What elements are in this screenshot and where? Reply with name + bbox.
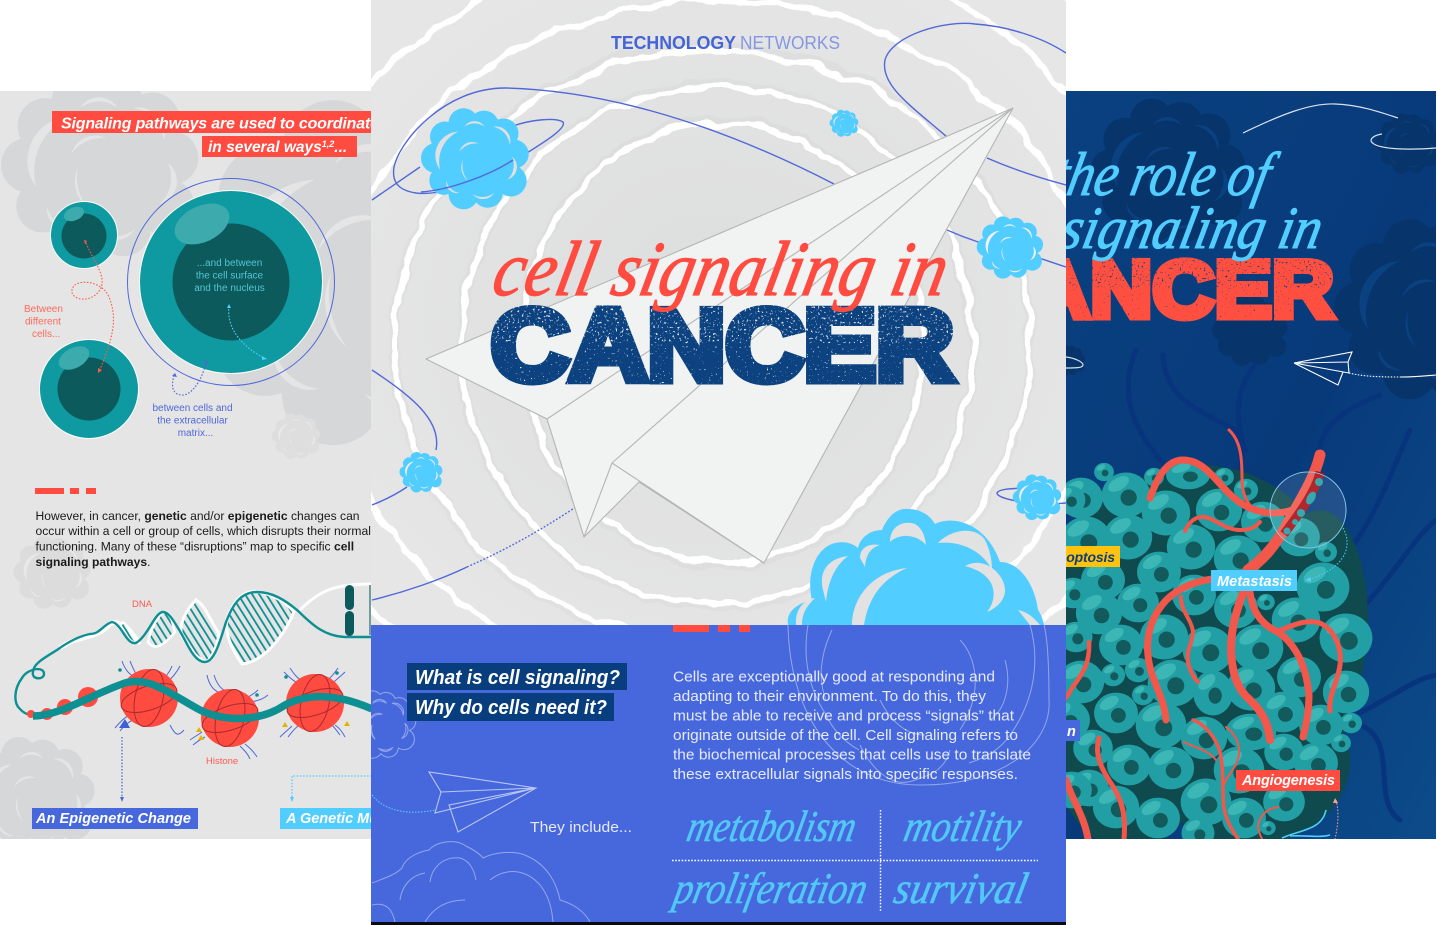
script words: responses: metabolism <box>683 801 861 851</box>
paragraph: what cell signaling is: these extracellular signals into specific responses. <box>673 766 1018 783</box>
script words: responses <box>667 801 1032 913</box>
icon: white paper plane <box>1294 352 1436 385</box>
question headings: Why do cells need it? <box>415 696 607 719</box>
arrow: surface to nucleus <box>227 304 267 360</box>
paragraph: what cell signaling is <box>673 668 1031 783</box>
label: Metastasis: Metastasis <box>1217 574 1292 590</box>
label: They include: They include... <box>530 820 632 836</box>
icon: light blue vessel tip <box>1282 810 1330 838</box>
magnifier: vessel with circulating cells <box>1270 472 1346 548</box>
dotted grid divider <box>672 810 1038 912</box>
paragraph: what cell signaling is: the biochemical processes that cells use to translate <box>673 746 1031 764</box>
label: DNA: DNA <box>132 599 153 610</box>
paragraph: disruptions in cancer <box>36 509 371 569</box>
label: between different cells <box>24 305 62 337</box>
title: CANCER, coral: CANCER <box>966 245 1334 335</box>
red dash divider <box>673 625 750 632</box>
red dash divider <box>35 488 96 494</box>
cell: small upper <box>50 202 118 268</box>
cloud planets <box>399 108 1061 520</box>
label: Proliferation: n <box>1067 724 1076 740</box>
label: cell surface and nucleus: ...and between <box>197 258 262 269</box>
background clouds <box>0 74 555 855</box>
orbit in front of planets <box>421 160 513 192</box>
arrow: angiogenesis pointer <box>1333 798 1338 839</box>
dark background clouds <box>1053 99 1437 399</box>
title: cell signaling in, red script: cell signaling in <box>486 227 957 313</box>
label: Apoptosis <box>1066 546 1120 567</box>
question headings <box>407 663 627 721</box>
label: Metastasis <box>1211 570 1297 591</box>
label: cell surface and nucleus <box>194 258 264 291</box>
tumor cluster base <box>1066 465 1368 839</box>
cell: large with membrane ring <box>128 178 334 386</box>
title: the role of: the role of <box>1047 140 1284 209</box>
panel: right page, role of signaling in cancer <box>1066 91 1436 839</box>
heading banner: signaling pathways: ... <box>334 139 347 156</box>
label: between different cells: Between <box>24 304 63 315</box>
label box: A Genetic Mutation: A Genetic Mutation <box>285 811 418 827</box>
label: Angiogenesis: Angiogenesis <box>1241 773 1335 789</box>
curve: white top orbit <box>1066 104 1436 368</box>
tentacle shadows <box>1128 350 1436 820</box>
blood vessels <box>1066 430 1340 839</box>
paragraph: disruptions in cancer: occur within a cell or group of cells, which disrupts their normal <box>36 524 371 538</box>
question headings: What is cell signaling? <box>415 666 620 689</box>
script words: responses: survival <box>890 863 1032 913</box>
tumor cells <box>1046 461 1372 848</box>
label: between different cells: cells... <box>32 329 60 340</box>
label: between different cells: different <box>25 316 61 328</box>
panel: blue lower band <box>344 509 1066 925</box>
cell: lower <box>40 340 138 438</box>
paper plane <box>426 108 1013 563</box>
panel: center cover page <box>196 0 1236 925</box>
label: Histone: Histone <box>206 756 238 767</box>
heading banner: signaling pathways: Signaling pathways are used to coordinate <box>61 116 379 132</box>
big blue cloud <box>788 509 1049 785</box>
DNA helix and chromosome <box>15 584 374 715</box>
label: cell surface and nucleus: the cell surface <box>196 270 264 282</box>
arrow: between different cells <box>72 240 113 373</box>
paragraph: what cell signaling is: originate outside of the cell. Cell signaling refers to <box>673 727 1018 744</box>
heading banner: signaling pathways: 1,2 <box>322 139 334 149</box>
arrow: magnifier to metastasis <box>1305 528 1347 582</box>
histones with wrapped strand <box>27 661 372 759</box>
paragraph: what cell signaling is: adapting to their environment. To do this, they <box>673 688 987 705</box>
title: CANCER, navy: CANCER <box>491 290 954 402</box>
paragraph: disruptions in cancer: signaling pathways. <box>36 555 150 569</box>
paragraph: what cell signaling is: Cells are exceptionally good at responding and <box>673 668 995 686</box>
heading banner: signaling pathways <box>52 111 379 157</box>
paragraph: what cell signaling is: must be able to receive and process “signals” that <box>673 708 1015 724</box>
paragraph: disruptions in cancer: However, in cancer, genetic and/or epigenetic changes can <box>36 509 360 523</box>
orbit lines <box>372 23 1066 600</box>
arrow: cell to matrix <box>172 361 208 395</box>
concentric white ripple rings <box>196 0 1236 815</box>
arrow: genetic mutation <box>290 776 372 802</box>
label: extracellular matrix: between cells and <box>152 403 233 414</box>
logo: Technology Networks <box>611 33 840 53</box>
script words: responses: motility <box>900 801 1027 851</box>
icon: outline paper plane <box>372 772 536 832</box>
label box: A Genetic Mutation <box>280 808 371 829</box>
label: extracellular matrix <box>153 404 232 436</box>
arrow: epigenetic change <box>120 737 124 802</box>
label box: An Epigenetic Change: An Epigenetic Change <box>35 811 191 827</box>
cloud outlines on band <box>344 509 1049 922</box>
title: cell signaling in: cell signaling in <box>963 196 1329 262</box>
label: Angiogenesis <box>1236 770 1340 791</box>
logo: Technology Networks: TECHNOLOGY <box>611 33 736 53</box>
logo: Technology Networks: NETWORKS <box>740 33 840 53</box>
heading banner: signaling pathways: in several ways <box>208 139 322 156</box>
script words: responses: proliferation <box>667 863 872 913</box>
label: extracellular matrix: the extracellular <box>157 416 228 426</box>
paragraph: disruptions in cancer: functioning. Many of these “disruptions” map to specific cell <box>36 540 354 554</box>
label: cell surface and nucleus: and the nucleus <box>194 283 265 294</box>
label: Apoptosis: Apoptosis <box>1047 549 1115 565</box>
panel: left page, how signaling works <box>0 91 371 839</box>
label: Proliferation <box>1066 720 1080 741</box>
label: extracellular matrix: matrix... <box>178 428 213 439</box>
